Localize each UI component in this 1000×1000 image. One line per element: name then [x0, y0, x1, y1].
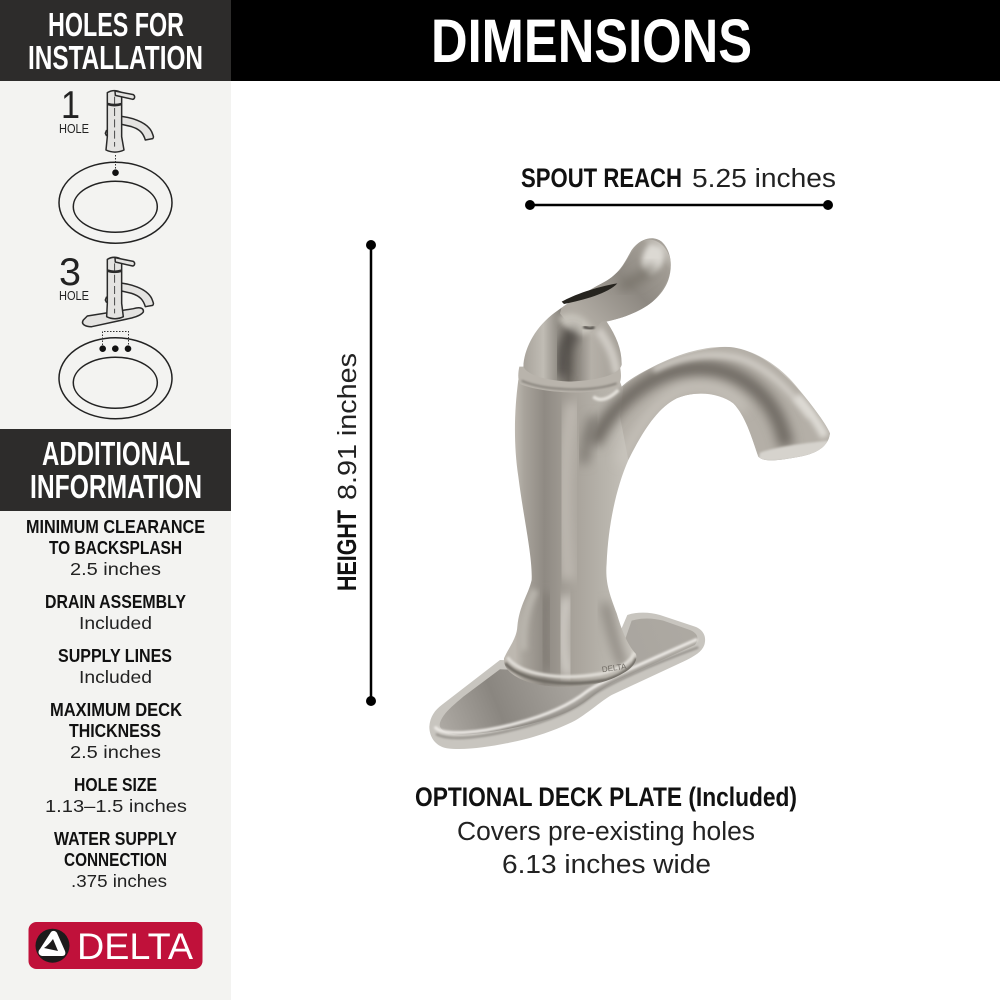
photo: faucet with deck plate	[429, 233, 833, 749]
text: minimum clearance	[26, 517, 205, 579]
callout: optional deck plate: Covers pre-existing holes	[457, 818, 755, 846]
text: water supply connection	[54, 829, 177, 891]
label: 1 hole	[59, 84, 89, 136]
text: drain assembly: Included	[79, 613, 152, 633]
label: 3 hole: 3	[59, 251, 81, 294]
text: supply lines: SUPPLY LINES	[58, 646, 172, 666]
text: height: HEIGHT	[332, 510, 362, 591]
text: supply lines	[58, 646, 172, 687]
logo stamp on base: DELTA	[601, 662, 628, 674]
icon: three hole faucet with deck plate	[83, 257, 153, 327]
text: spout reach	[521, 163, 836, 193]
collar ring	[518, 367, 621, 392]
heading: additional information: ADDITIONAL	[42, 435, 190, 472]
icon: sink one hole	[59, 155, 172, 243]
text: water supply connection: CONNECTION	[64, 850, 167, 870]
panel: left sidebar	[0, 0, 231, 1000]
label: 3 hole	[59, 251, 89, 303]
heading: holes for installation: HOLES FOR	[48, 6, 184, 43]
text: drain assembly	[45, 592, 186, 633]
text: spout reach: 5.25 inches	[692, 165, 836, 193]
arrow: height dimension line	[366, 240, 376, 706]
text: minimum clearance: TO BACKSPLASH	[49, 538, 182, 558]
text: hole size	[45, 775, 187, 816]
text: maximum deck thickness: THICKNESS	[69, 721, 161, 741]
text: maximum deck thickness	[50, 700, 182, 762]
text: hole size: 1.13–1.5 inches	[45, 796, 187, 816]
icon: sink three holes	[59, 332, 172, 419]
logo: Delta: DELTA	[77, 926, 193, 967]
text: maximum deck thickness: MAXIMUM DECK	[50, 700, 182, 720]
icon: single hole faucet	[105, 91, 153, 152]
text: hole size: HOLE SIZE	[74, 775, 157, 795]
arrow: spout reach dimension line	[525, 200, 833, 210]
text: drain assembly: DRAIN ASSEMBLY	[45, 592, 186, 612]
text: height: 8.91 inches	[334, 353, 362, 500]
text: water supply connection: WATER SUPPLY	[54, 829, 177, 849]
cap	[523, 238, 671, 382]
text: maximum deck thickness: 2.5 inches	[70, 742, 161, 762]
heading: additional information	[0, 429, 231, 511]
callout: optional deck plate: 6.13 inches wide	[502, 851, 711, 879]
dark slot under handle	[562, 283, 617, 304]
title bar	[231, 0, 1000, 81]
callout: optional deck plate: OPTIONAL DECK PLATE (Included)	[415, 782, 797, 812]
logo: Delta	[28, 922, 202, 969]
label: 3 hole: HOLE	[59, 289, 89, 303]
callout: optional deck plate	[415, 782, 797, 879]
deck plate	[429, 613, 705, 749]
label: 1 hole: 1	[61, 84, 80, 127]
title bar: DIMENSIONS	[431, 7, 752, 75]
heading: additional information: INFORMATION	[30, 468, 202, 505]
heading: holes for installation	[0, 0, 231, 81]
text: minimum clearance: 2.5 inches	[70, 559, 161, 579]
text: minimum clearance: MINIMUM CLEARANCE	[26, 517, 205, 537]
text: supply lines: Included	[79, 667, 152, 687]
text: height	[332, 353, 362, 591]
text: water supply connection: .375 inches	[71, 871, 167, 891]
label: 1 hole: HOLE	[59, 122, 89, 136]
heading: holes for installation: INSTALLATION	[28, 39, 203, 76]
faucet body and spout	[500, 343, 833, 690]
text: spout reach: SPOUT REACH	[521, 163, 682, 193]
spout tone	[620, 347, 833, 463]
body highlights	[565, 403, 573, 580]
